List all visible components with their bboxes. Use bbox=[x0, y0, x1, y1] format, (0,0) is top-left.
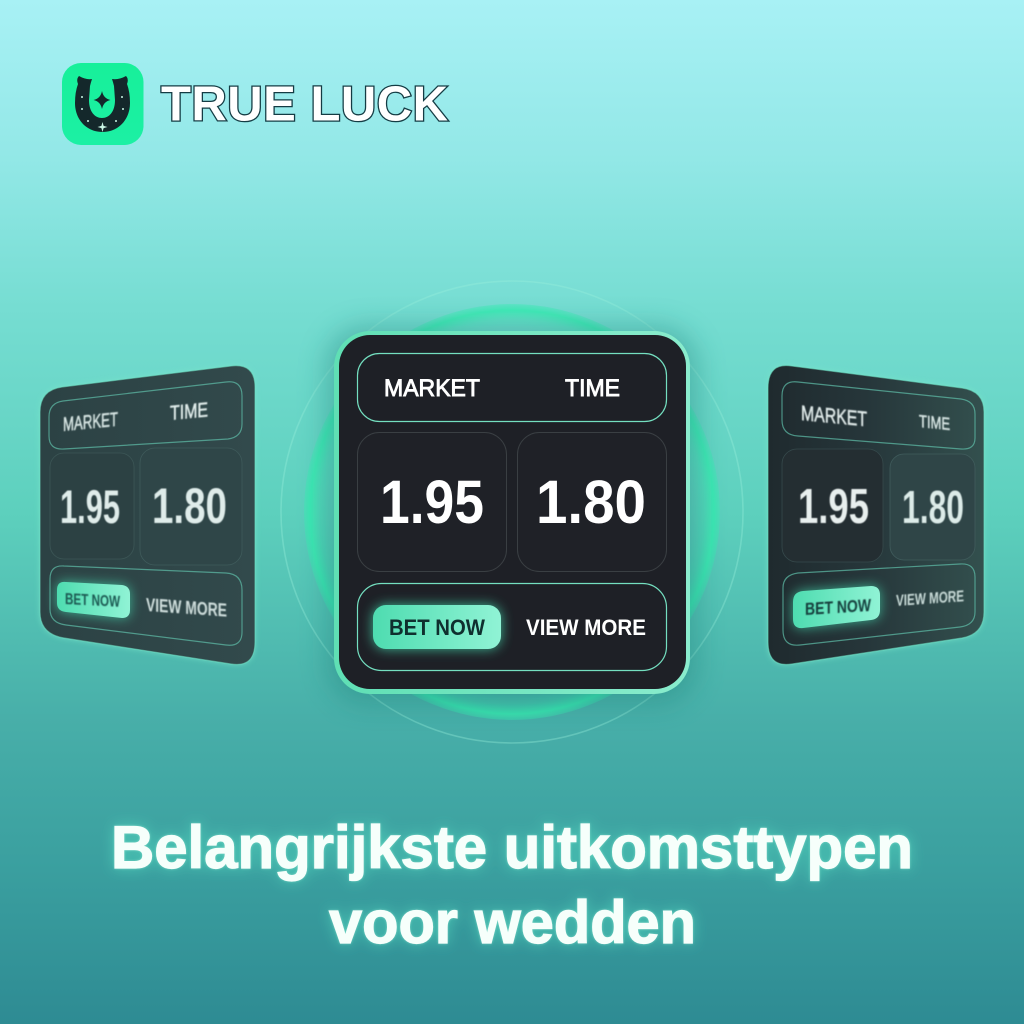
action row: VIEW MORE bbox=[146, 595, 227, 621]
wordmark: TRUE LUCK bbox=[161, 78, 448, 132]
panel: left market card bbox=[40, 366, 255, 665]
odds cell: 1.80 bbox=[140, 448, 242, 565]
header row bbox=[782, 382, 975, 449]
title bbox=[111, 813, 913, 956]
title: Belangrijkste uitkomsttypen bbox=[111, 813, 913, 881]
header row: TIME bbox=[565, 375, 620, 402]
odds cell: 1.95: 1.95 bbox=[60, 480, 120, 533]
button: bet now bbox=[793, 586, 880, 628]
odds cell: 1.80: 1.80 bbox=[536, 468, 646, 536]
odds cell: 1.95 bbox=[50, 453, 134, 559]
button: bet now: BET NOW bbox=[389, 615, 485, 640]
odds cell: 1.95 bbox=[782, 449, 883, 562]
header row bbox=[49, 382, 242, 449]
button: bet now bbox=[57, 582, 130, 618]
action row bbox=[358, 584, 666, 670]
panel: right market card bbox=[768, 365, 984, 665]
header row: TIME bbox=[170, 399, 208, 425]
odds cell: 1.95: 1.95 bbox=[798, 480, 869, 534]
header row: MARKET bbox=[801, 402, 867, 431]
header row: MARKET bbox=[384, 375, 480, 402]
odds cell: 1.95 bbox=[358, 432, 506, 572]
button: bet now bbox=[373, 605, 501, 649]
action row bbox=[783, 564, 975, 645]
button: bet now: BET NOW bbox=[65, 591, 121, 611]
odds cell: 1.80 bbox=[890, 454, 975, 560]
logo bbox=[62, 63, 448, 145]
odds cell: 1.95: 1.95 bbox=[380, 468, 484, 536]
button: bet now: BET NOW bbox=[805, 595, 871, 619]
header row bbox=[358, 354, 666, 422]
odds cell: 1.80 bbox=[518, 432, 666, 572]
action row bbox=[50, 566, 242, 645]
action row: VIEW MORE bbox=[526, 615, 646, 640]
action row: VIEW MORE bbox=[896, 588, 964, 610]
glowing rings bbox=[281, 281, 743, 743]
header row: TIME bbox=[919, 411, 950, 434]
odds cell: 1.80: 1.80 bbox=[152, 478, 227, 534]
title: voor wedden bbox=[329, 888, 696, 956]
panel: central market card bbox=[326, 326, 698, 704]
header row: MARKET bbox=[63, 409, 118, 436]
icon: horseshoe app icon bbox=[62, 63, 144, 145]
odds cell: 1.80: 1.80 bbox=[902, 481, 964, 533]
